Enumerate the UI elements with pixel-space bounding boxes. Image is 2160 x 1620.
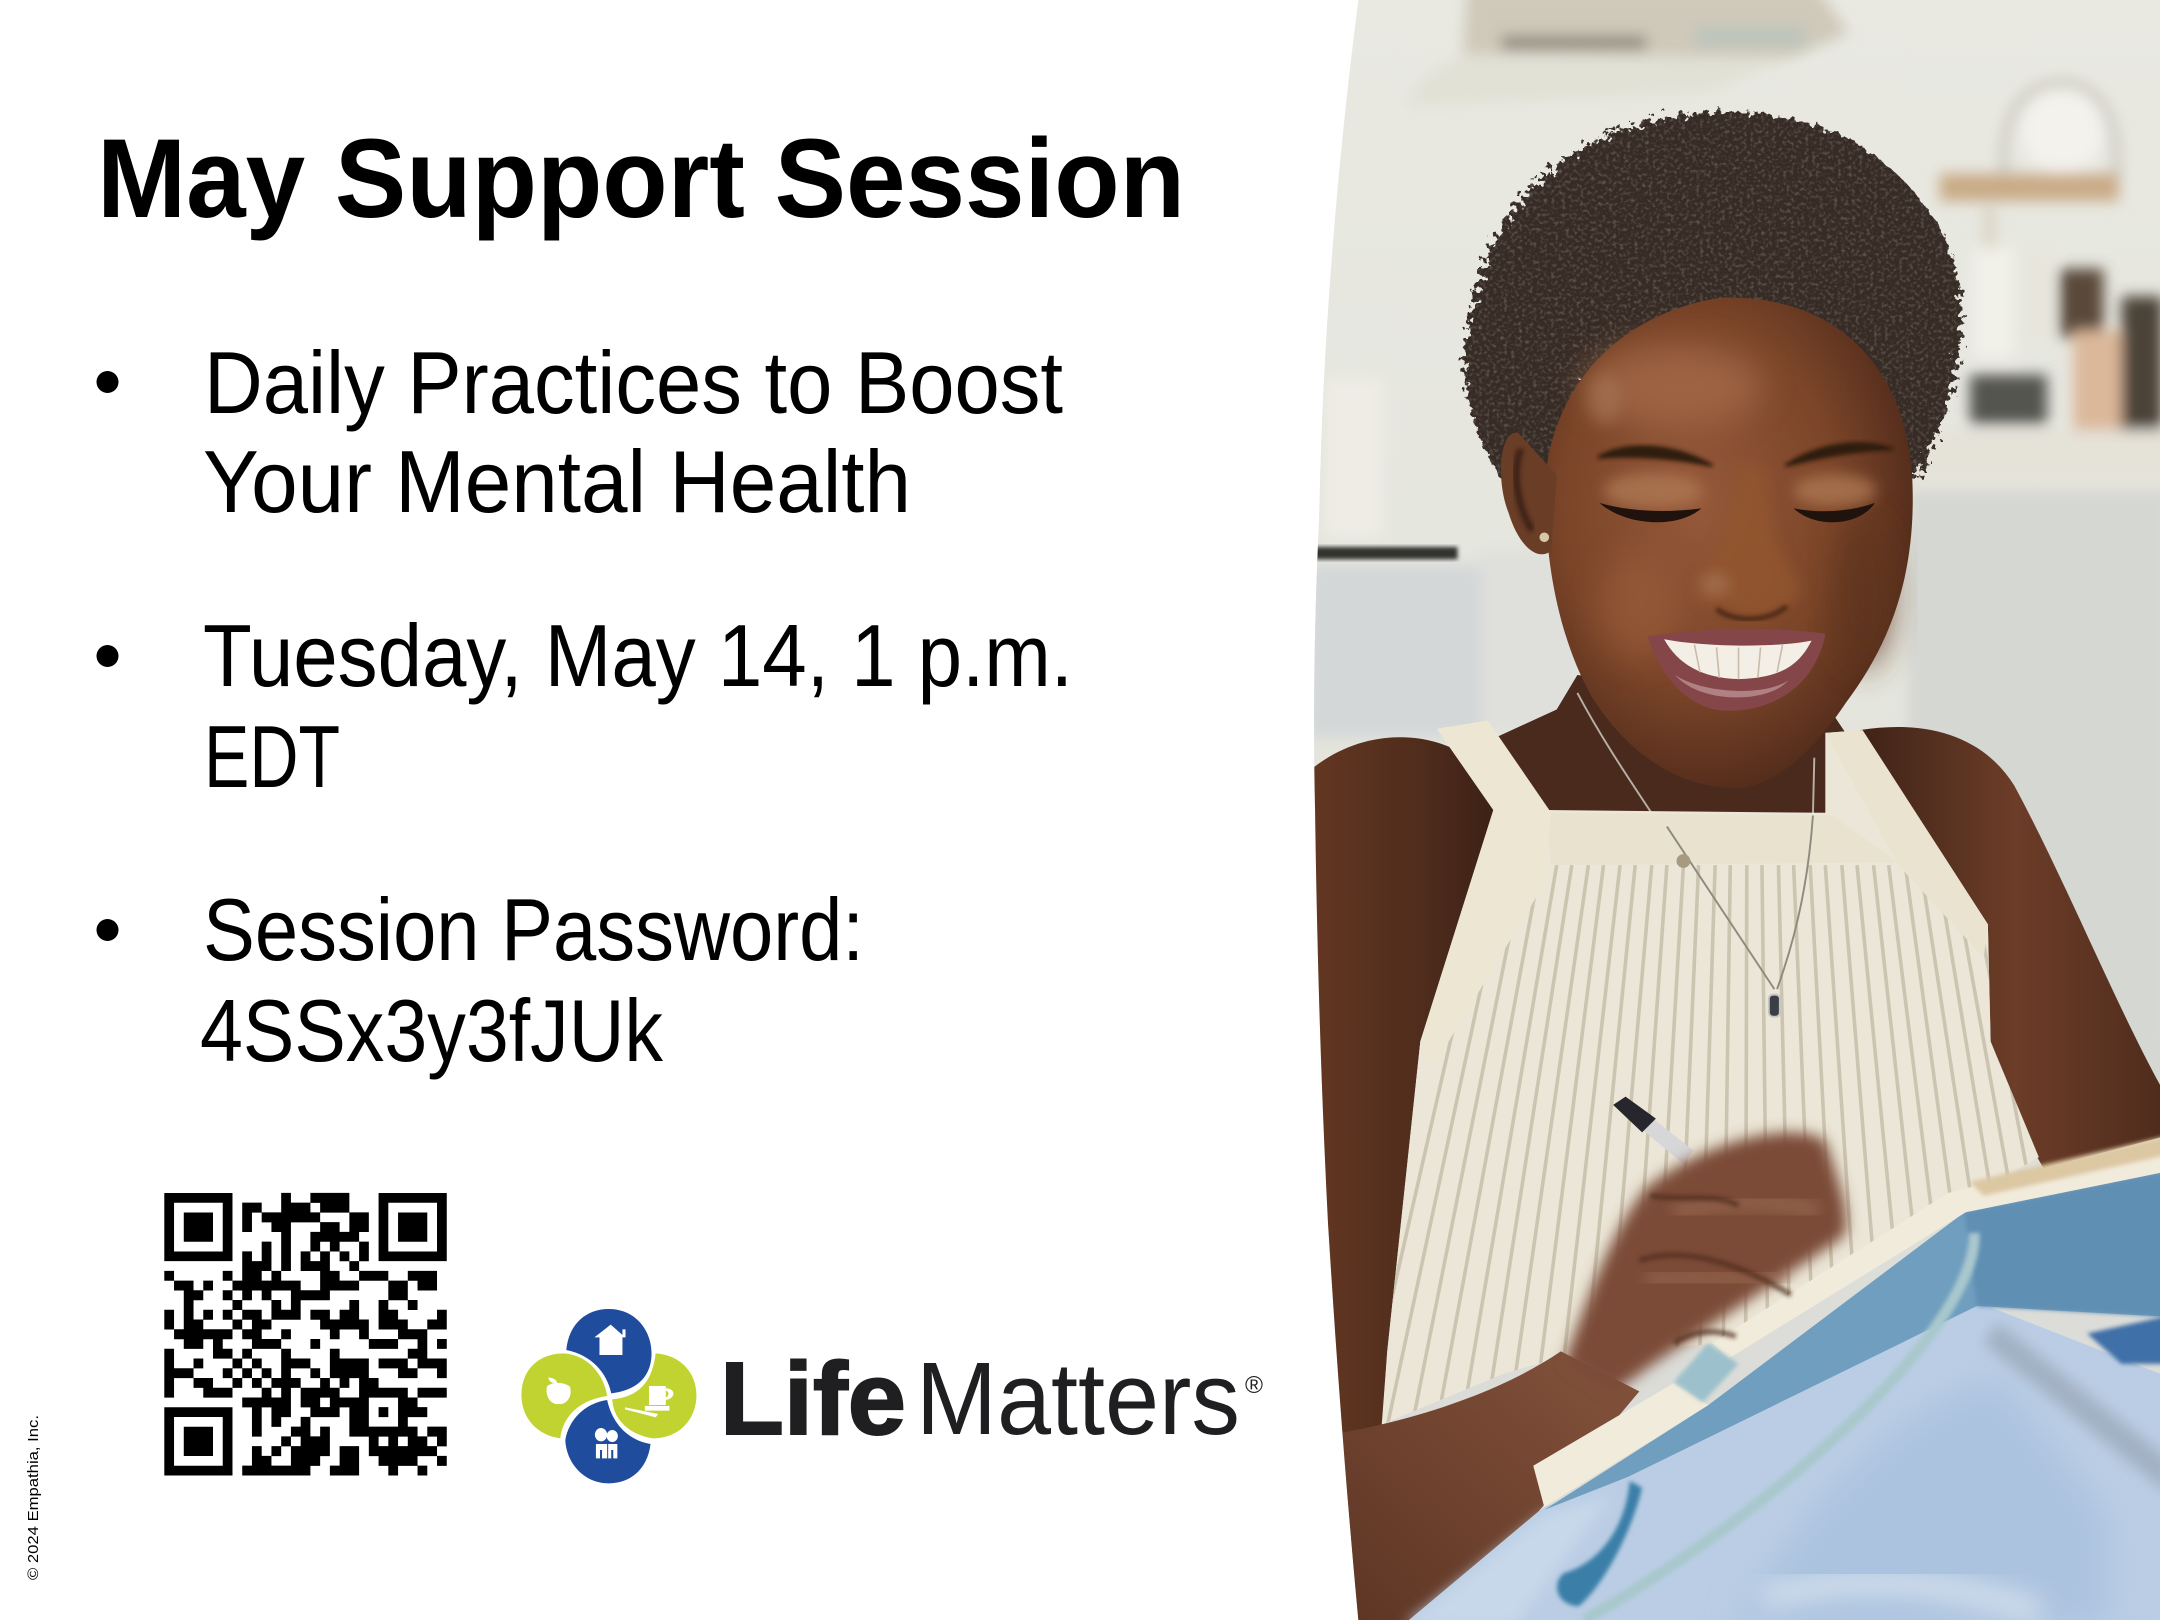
necklace lower and pendant [1667, 816, 1813, 1017]
copyright note: © 2024 Empathia, Inc. [25, 1415, 42, 1580]
band clasp [1674, 1343, 1739, 1402]
elastic band [1584, 1233, 1974, 1620]
knuckle highlights [1674, 1202, 1818, 1212]
bullet: session topic [96, 333, 1063, 531]
ribbon loop [1557, 1481, 1642, 1606]
bullet: session topic: Daily Practices to Boost [204, 333, 1063, 432]
forearm [1342, 1351, 1639, 1620]
earring [1539, 532, 1549, 542]
neck and chest [1498, 675, 1844, 813]
photo: smiling woman writing in a notebook [1295, 0, 2160, 1620]
logo: LifeMatters [521, 1309, 1263, 1483]
bullet: session password: 4SSx3y3fJUk [200, 981, 664, 1080]
bullet: date and time [96, 606, 1073, 806]
wordmark: ® [1245, 1372, 1263, 1399]
bullet: session topic: Your Mental Health [203, 432, 911, 531]
notebook pages: lower section [1533, 1383, 1708, 1507]
pen [1613, 1097, 1693, 1164]
wordmark: Matters [916, 1341, 1240, 1456]
notebook [1533, 1135, 2160, 1620]
icon: house with plant [594, 1325, 626, 1355]
wordmark: Life [720, 1341, 906, 1456]
bullet: session password: Session Password: [203, 880, 864, 979]
notebook cover [1544, 1171, 2160, 1510]
bullet: date and time: EDT [204, 707, 340, 806]
bullet: session password [96, 880, 864, 1080]
petal: top blue [566, 1309, 652, 1393]
eyelids [1604, 473, 1703, 508]
title: May Support Session [97, 116, 1185, 241]
right arm and shoulder [1860, 727, 2160, 1185]
icon: apple [547, 1377, 571, 1404]
petal: right green [612, 1353, 696, 1438]
notebook strap shadow [2087, 1316, 2160, 1364]
icon: family [595, 1428, 618, 1458]
jeans [1402, 1302, 2160, 1620]
nose [1725, 534, 1798, 614]
hair [1464, 112, 1961, 493]
notebook pages: upper section [1712, 1135, 2160, 1358]
hand [1564, 1132, 1846, 1394]
petal: left green [521, 1353, 607, 1438]
left arm and shoulder [1309, 737, 1502, 1433]
face [1501, 297, 1913, 788]
teeth [1664, 639, 1812, 679]
page tan edge [1970, 1135, 2160, 1196]
cheek shading [1600, 564, 1672, 656]
petal: bottom blue [565, 1400, 651, 1483]
necklace [1576, 692, 1816, 813]
wordmark [720, 1341, 1263, 1456]
logo mark: four petals with icons [521, 1309, 696, 1483]
photo background: blurred kitchen [1295, 0, 2160, 1620]
forehead highlight [1584, 344, 1763, 427]
mouth [1648, 629, 1825, 711]
eyebrows [1598, 447, 1712, 466]
icon: mug with pencil [625, 1386, 673, 1417]
bullet list [96, 333, 1073, 1080]
eyes [1599, 503, 1701, 522]
knit ribs [1386, 865, 2028, 1422]
QR code [164, 1193, 447, 1475]
fingers shading [1639, 1196, 1791, 1343]
bullet: date and time: Tuesday, May 14, 1 p.m. [203, 606, 1073, 705]
ear [1501, 432, 1557, 554]
tank top [1361, 720, 2077, 1433]
